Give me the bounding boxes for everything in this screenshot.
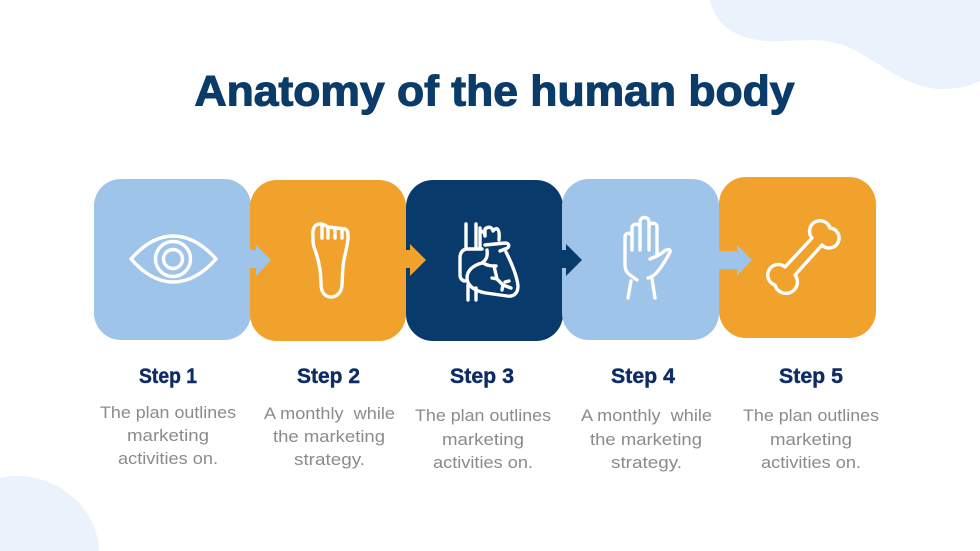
text block: step 1: marketing: [127, 426, 209, 445]
panel: step 3 heart: [406, 180, 563, 341]
text block: step 3: Step 3: [450, 365, 514, 388]
text block: step 4: strategy.: [611, 453, 682, 472]
text block: step 3: activities on.: [433, 453, 533, 472]
text block: step 5: The plan outlines: [743, 406, 879, 425]
icon: foot: [313, 224, 348, 297]
text block: step 1: activities on.: [118, 449, 218, 468]
text block: step 2: [264, 365, 395, 469]
text block: step 1: Step 1: [139, 365, 197, 388]
text block: step 5: Step 5: [779, 365, 843, 388]
arrow: step 4 to step 5: [719, 245, 752, 276]
background blob: bottom left: [0, 476, 99, 551]
arrow: step 2 to step 3: [406, 244, 426, 276]
text block: step 4: A monthly while: [581, 406, 712, 425]
text block: step 5: activities on.: [761, 453, 861, 472]
text block: step 1: [100, 365, 236, 468]
text block: step 3: [415, 365, 551, 472]
panel: step 4 hand: [562, 179, 719, 340]
text block: step 4: Step 4: [611, 365, 675, 388]
text block: step 2: the marketing: [273, 427, 385, 446]
icon: bone: [768, 221, 839, 293]
text block: step 5: marketing: [770, 430, 852, 449]
panel: step 5 bone: [719, 177, 876, 338]
text block: step 1: The plan outlines: [100, 403, 236, 422]
text block: step 5: [743, 365, 879, 472]
icon: heart: [460, 224, 518, 300]
text block: step 3: marketing: [442, 430, 524, 449]
title: Anatomy of the human body: [194, 68, 795, 116]
panel: step 2 foot: [250, 180, 406, 341]
text block: step 4: the marketing: [590, 430, 702, 449]
text block: step 2: Step 2: [297, 365, 360, 388]
text block: step 4: [581, 365, 712, 472]
text block: step 2: strategy.: [294, 450, 365, 469]
text block: step 3: The plan outlines: [415, 406, 551, 425]
panel: step 1 eye: [94, 179, 251, 340]
background blob: top right: [710, 0, 980, 89]
arrow: step 1 to step 2: [250, 245, 271, 276]
arrow: step 3 to step 4: [562, 244, 582, 276]
icon: hand: [625, 218, 670, 298]
icon: eye: [131, 236, 216, 282]
text block: step 2: A monthly while: [264, 404, 395, 423]
